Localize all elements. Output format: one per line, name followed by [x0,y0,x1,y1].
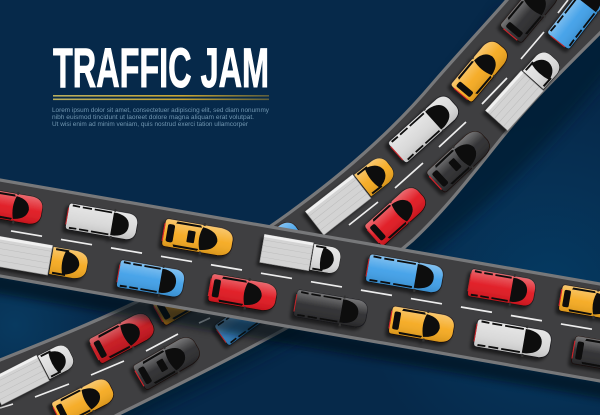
hidden blue van [213,284,285,348]
red van [467,267,537,309]
road surface: straight [0,177,600,384]
long truck with orange cab [0,235,90,281]
orange car bottom [50,374,118,415]
blue van [365,252,445,296]
red car upper [363,182,431,248]
body text [52,107,270,128]
red car middle [207,272,279,314]
lane dashes: straight road [0,222,600,332]
white van upper [386,91,464,165]
black car upper [425,125,495,195]
white truck upper [485,47,565,131]
black car top [498,0,564,45]
straight road [0,177,600,384]
white truck lower left [0,341,77,405]
blue car behind truck [237,216,307,280]
white van [65,201,139,243]
hidden orange car [150,268,222,328]
title block [52,36,270,128]
body text: Lorem ipsum dolor sit amet, consectetuer adipiscing elit, sed diam nonummy [52,107,270,114]
gold double rule [53,95,269,100]
curb: straight road bottom [0,274,600,383]
cars on straight road [0,186,600,376]
title: TRAFFIC JAM [53,36,269,99]
black car right [571,334,600,376]
blue car [116,258,186,300]
white van lower [473,317,553,361]
black car lower [131,332,205,392]
red car lower [87,308,159,366]
curb: straight road top [0,178,600,286]
body text: Ut wisi enim ad minim veniam, quis nostrud exerci tation ullamcorper [52,121,249,128]
curb: curved road outer edge [0,0,515,364]
red car [0,186,45,228]
white truck [260,234,342,276]
truck with orange cab [305,153,399,235]
orange car upper [449,36,513,104]
orange car right [558,283,600,323]
black van [293,288,369,330]
shadow of straight road [0,272,600,400]
body text: nibh euismod tincidunt ut laoreet dolore magna aliquam erat volutpat. [52,114,254,121]
orange car [161,216,235,260]
blue van top [545,0,600,51]
orange car lower [388,304,456,346]
